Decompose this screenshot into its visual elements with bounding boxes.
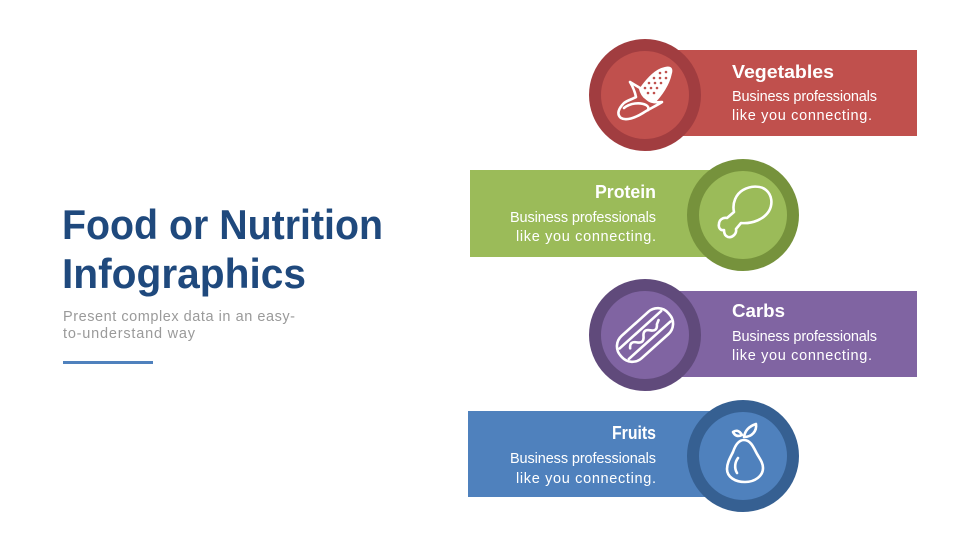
heading: protein: Protein — [595, 182, 656, 202]
subtitle: Present complex data in an easy- — [63, 309, 295, 325]
body text: carbs — [732, 329, 877, 364]
body text: protein: like you connecting. — [516, 229, 656, 245]
body text: vegetables: Business professionals — [732, 89, 877, 105]
body text: carbs: Business professionals — [732, 329, 877, 345]
subtitle — [63, 309, 295, 342]
title: Infographics — [62, 250, 306, 297]
title — [62, 201, 383, 297]
body text: carbs: like you connecting. — [732, 348, 872, 364]
heading: carbs: Carbs — [732, 301, 785, 321]
panel: fruits — [468, 406, 793, 506]
body text: protein — [510, 210, 656, 245]
body text: protein: Business professionals — [510, 210, 656, 226]
body text: fruits — [510, 451, 656, 487]
title: Food or Nutrition — [62, 201, 383, 248]
panel: carbs — [595, 285, 917, 385]
body text: fruits: like you connecting. — [516, 471, 656, 487]
icon: chicken drumstick — [719, 187, 771, 237]
subtitle: to-understand way — [63, 326, 196, 342]
heading: fruits: Fruits — [612, 423, 656, 443]
accent underline — [63, 361, 153, 364]
heading: vegetables: Vegetables — [732, 62, 834, 82]
icon: pear — [727, 424, 763, 482]
icon: corn — [618, 67, 672, 119]
panel: protein — [470, 165, 793, 265]
body text: vegetables: like you connecting. — [732, 108, 872, 124]
body text: fruits: Business professionals — [510, 451, 656, 467]
panel: vegetables — [595, 45, 917, 145]
body text: vegetables — [732, 89, 877, 124]
icon: hot dog — [611, 302, 679, 368]
